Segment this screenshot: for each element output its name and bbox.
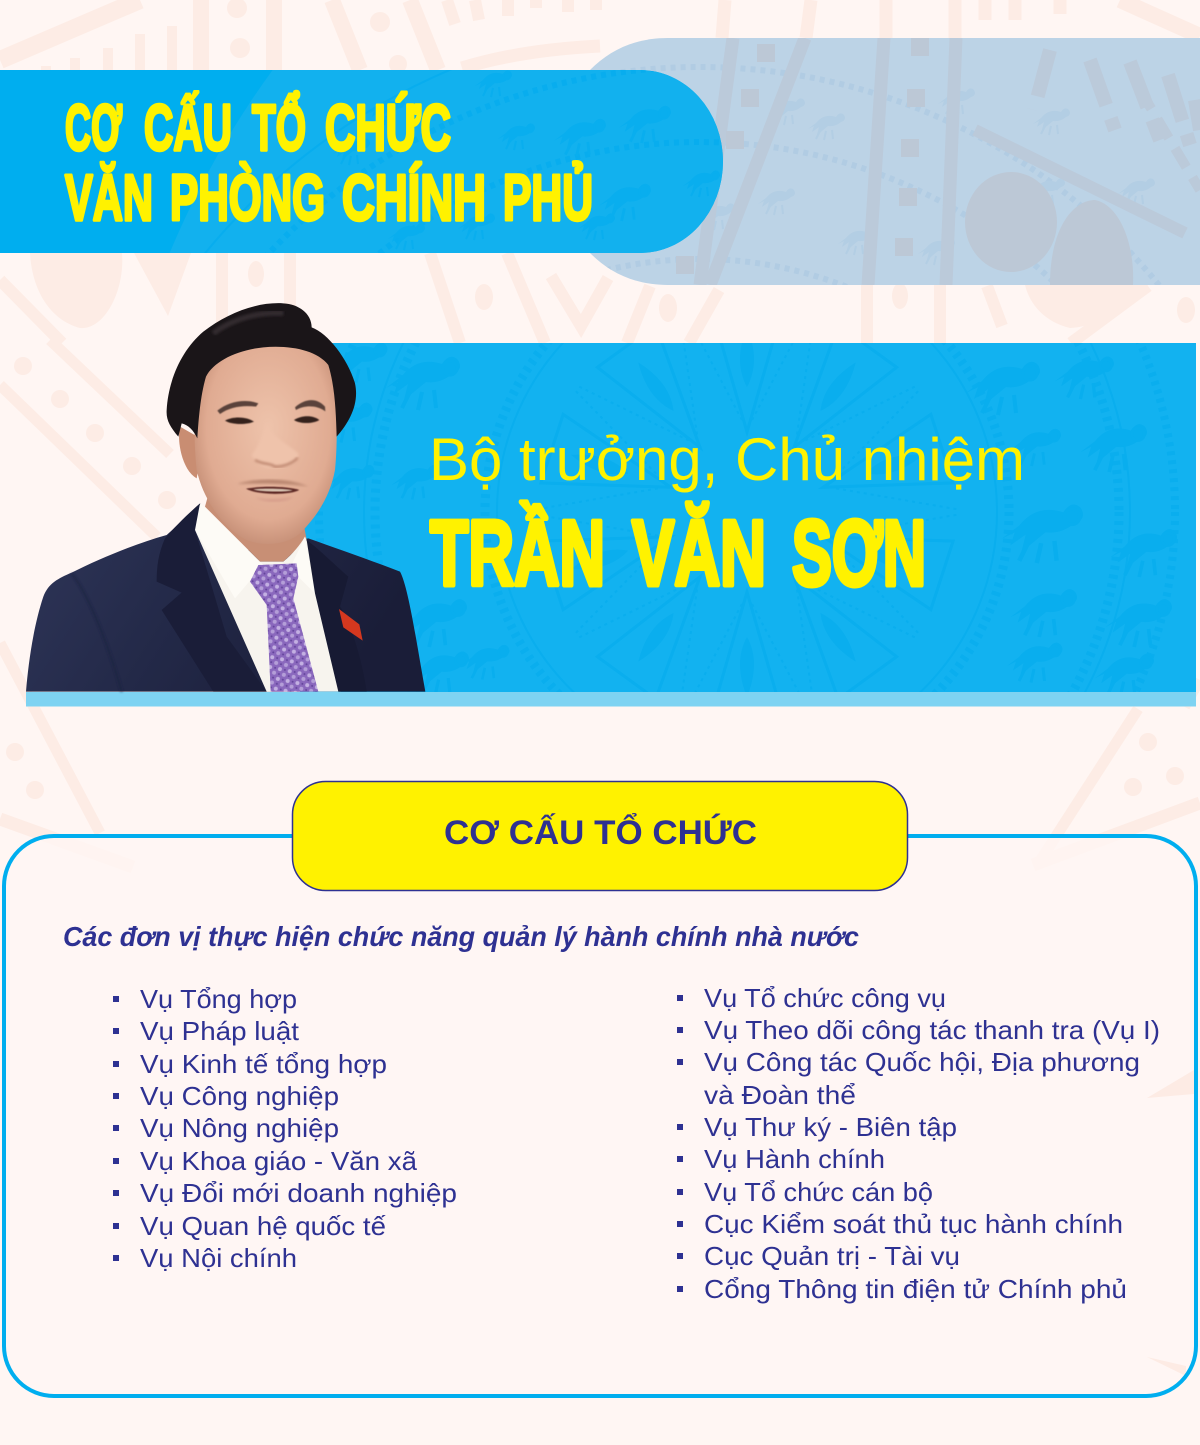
left list: Vụ Khoa giáo - Văn xã [140, 1146, 418, 1176]
title text: CHÍNH [342, 161, 486, 234]
tie [250, 563, 318, 692]
left list: Vụ Kinh tế tổng hợp [140, 1049, 387, 1079]
title text: CẤU [144, 91, 232, 164]
left list: Vụ Nội chính [140, 1243, 297, 1273]
left list [113, 984, 457, 1273]
title text: VĂN [65, 161, 153, 234]
title text: PHỦ [503, 161, 593, 234]
right list [677, 983, 1160, 1304]
sleeve seam [72, 573, 122, 692]
band drum motif [170, 70, 723, 253]
mouth [246, 487, 299, 494]
section heading pill: CƠ CẤU TỔ CHỨC [444, 814, 757, 852]
minister role: Bộ trưởng, Chủ nhiệm [429, 426, 1025, 493]
right list: Cục Kiểm soát thủ tục hành chính [704, 1209, 1123, 1239]
section subheading: Các đơn vị thực hiện chức năng quản lý hành chính nhà nước [63, 921, 859, 952]
jacket [26, 503, 425, 692]
banner base strip [26, 692, 1196, 706]
minister banner [26, 343, 1196, 706]
face [179, 332, 337, 544]
hair sheen [213, 313, 283, 333]
right list: Vụ Công tác Quốc hội, Địa phương [704, 1047, 1140, 1077]
right list: Vụ Thư ký - Biên tập [704, 1112, 957, 1142]
portrait of minister [26, 303, 425, 692]
background drum pattern [0, 0, 1200, 867]
minister name [430, 501, 926, 605]
nose [252, 423, 298, 468]
organisation box [4, 782, 1196, 1396]
minister name: SƠN [792, 501, 926, 605]
right list: Vụ Hành chính [704, 1144, 885, 1174]
moustache shadow [237, 479, 308, 487]
title text: CƠ [65, 91, 122, 164]
right list: Vụ Tổ chức cán bộ [704, 1177, 933, 1207]
section heading pill [292, 782, 908, 890]
left list: Vụ Đổi mới doanh nghiệp [140, 1178, 457, 1208]
eyebrows [217, 400, 325, 414]
ear [179, 427, 203, 478]
bands seen through panel [700, 38, 1200, 285]
left list: Vụ Pháp luật [140, 1016, 300, 1046]
title band [0, 70, 723, 253]
left list: Vụ Nông nghiệp [140, 1113, 339, 1143]
lapels [157, 503, 267, 692]
title text: PHÒNG [170, 161, 325, 234]
right list: Vụ Tổ chức công vụ [704, 983, 946, 1013]
banner drum pattern [316, 343, 1179, 692]
left list: Vụ Công nghiệp [140, 1081, 339, 1111]
left list: Vụ Tổng hợp [140, 984, 297, 1014]
title text: CHỨC [325, 91, 451, 164]
right list: Vụ Theo dõi công tác thanh tra (Vụ I) [704, 1015, 1160, 1045]
neck [205, 477, 307, 562]
eyes [225, 416, 319, 424]
hair [167, 303, 356, 438]
right list: và Đoàn thể [704, 1080, 856, 1110]
box outline [4, 836, 1196, 1396]
right list: Cổng Thông tin điện tử Chính phủ [704, 1274, 1127, 1304]
minister name: VĂN [632, 501, 766, 605]
faint edge motifs [1147, 1070, 1194, 1376]
drum rings in panel [607, 64, 1161, 285]
title text [65, 91, 593, 234]
left list: Vụ Quan hệ quốc tế [140, 1211, 387, 1241]
minister name: TRẦN [430, 501, 605, 605]
title text: TỔ [252, 91, 306, 164]
right list: Cục Quản trị - Tài vụ [704, 1241, 960, 1271]
pale blue panel behind title [590, 38, 1200, 285]
shirt [194, 503, 341, 692]
lapel pin [339, 609, 363, 641]
